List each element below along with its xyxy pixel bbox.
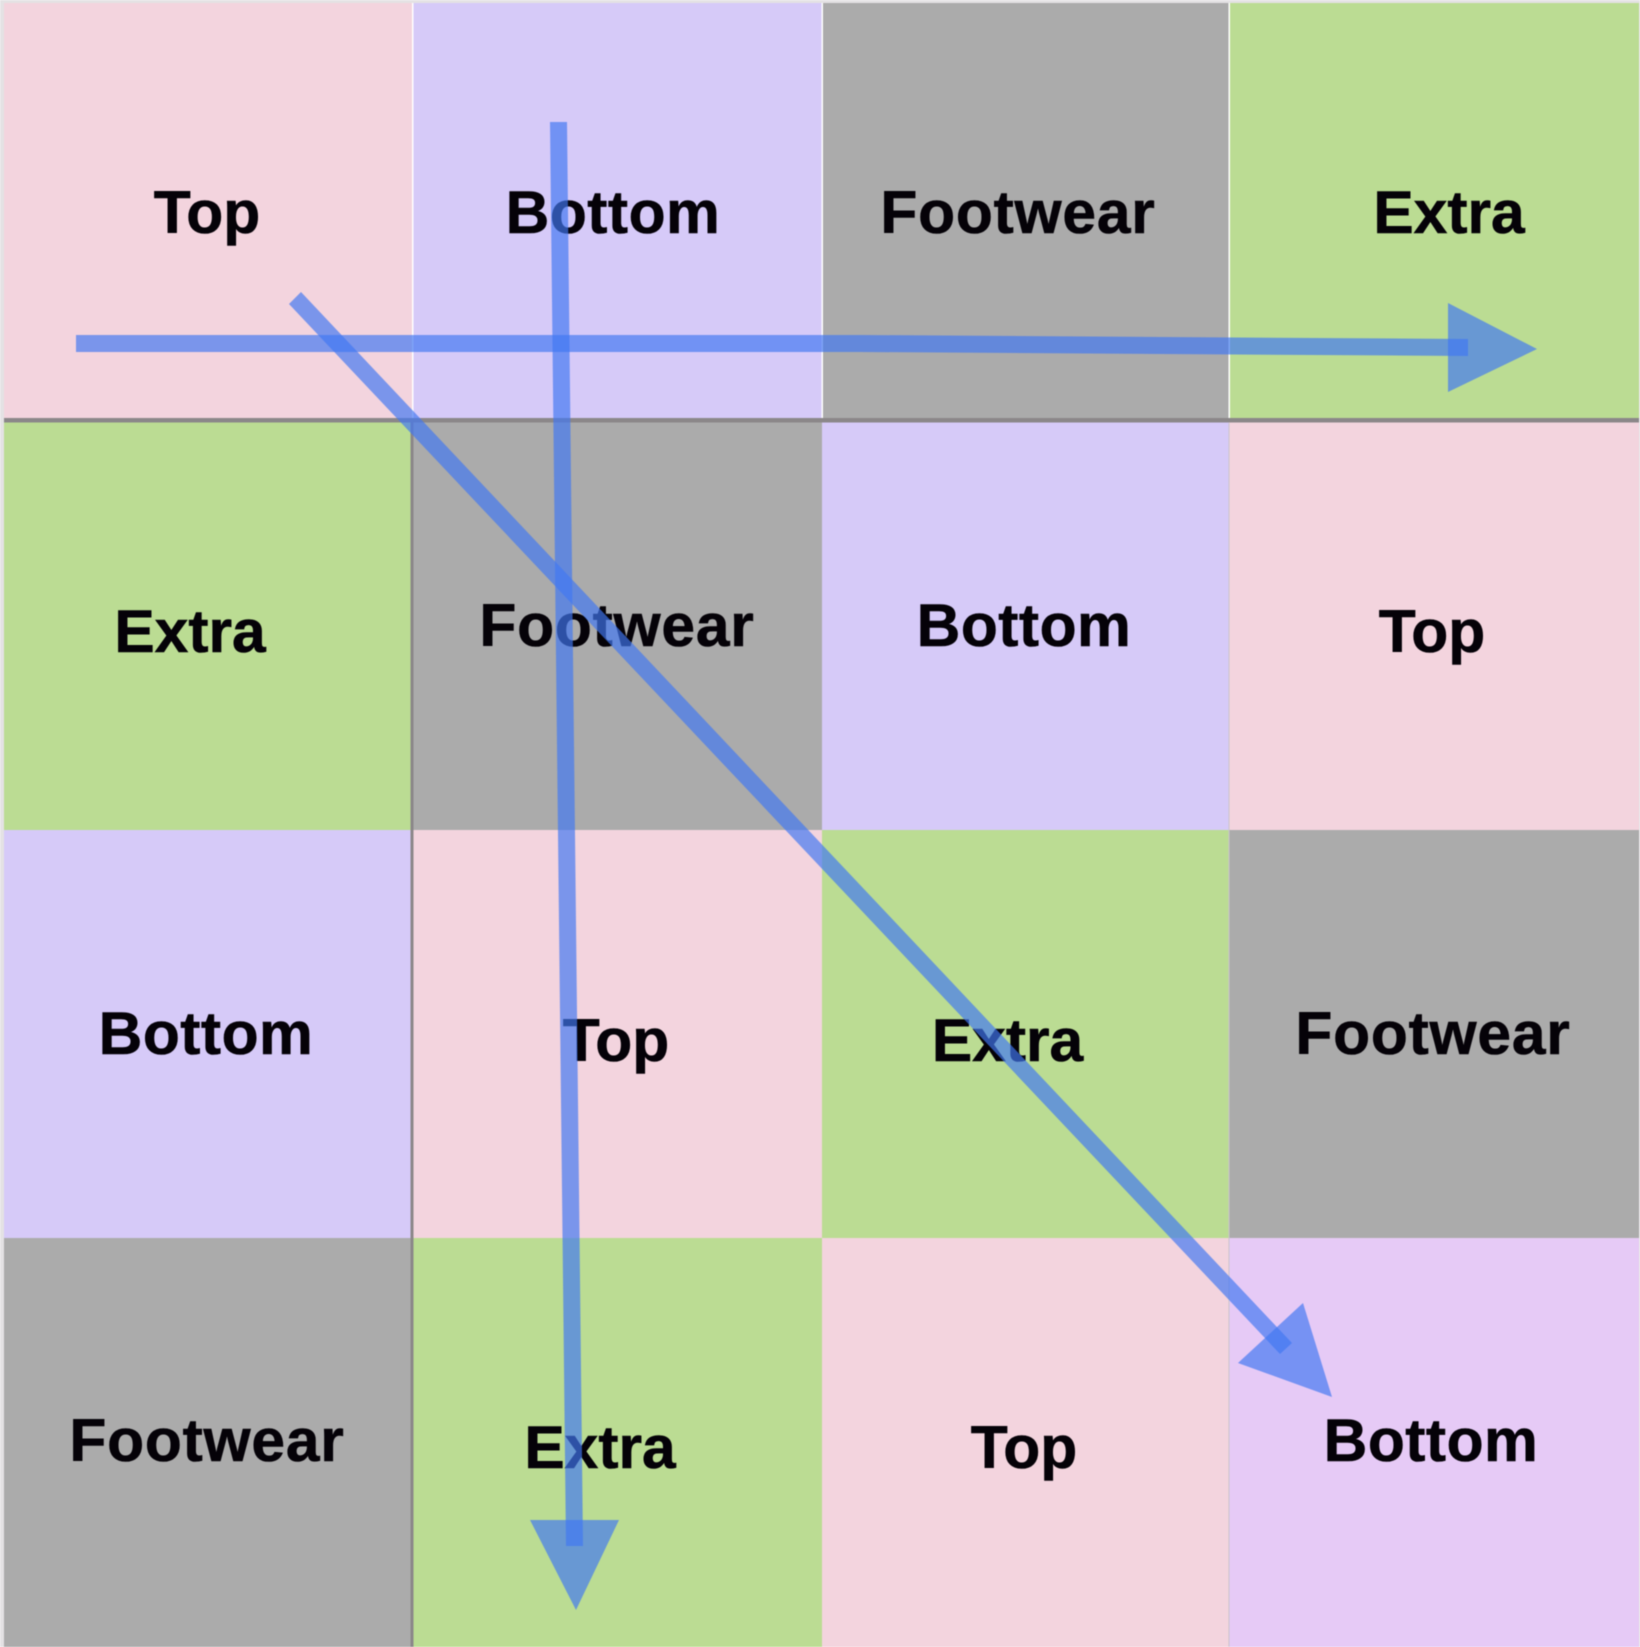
- row 1 cells: [4, 3, 1639, 420]
- row 4 labels: Top: [971, 1413, 1077, 1481]
- row 3 cells: [4, 830, 1639, 1238]
- row 2 labels: Top: [1379, 597, 1485, 665]
- arrow: vertical down the second column: [530, 122, 619, 1610]
- row 2 labels: Footwear: [479, 591, 755, 659]
- row 3 labels: Top: [563, 1006, 669, 1074]
- row 4 labels: Bottom: [1324, 1406, 1538, 1474]
- row 3 labels: Footwear: [1295, 999, 1571, 1067]
- row 2 labels: Bottom: [917, 591, 1131, 659]
- row 4 labels: Footwear: [69, 1406, 345, 1474]
- row 3 labels: [99, 999, 1571, 1074]
- row 1 labels: Footwear: [880, 178, 1156, 246]
- row 2 labels: [114, 591, 1485, 665]
- row 4 labels: [69, 1406, 1538, 1481]
- row 1 labels: Bottom: [506, 178, 720, 246]
- row 1 labels: Top: [154, 178, 260, 246]
- row 4 labels: Extra: [524, 1413, 677, 1481]
- row 2 labels: Extra: [114, 597, 267, 665]
- row 4 cells: [4, 1238, 1639, 1647]
- arrow: horizontal across the top row: [76, 303, 1537, 392]
- row 1 labels: Extra: [1373, 178, 1526, 246]
- row 1 labels: [154, 178, 1526, 246]
- row 3 labels: Extra: [932, 1006, 1085, 1074]
- row 2 cells: [4, 420, 1639, 830]
- arrow: diagonal to the bottom-right corner: [289, 292, 1332, 1397]
- row 3 labels: Bottom: [99, 999, 313, 1067]
